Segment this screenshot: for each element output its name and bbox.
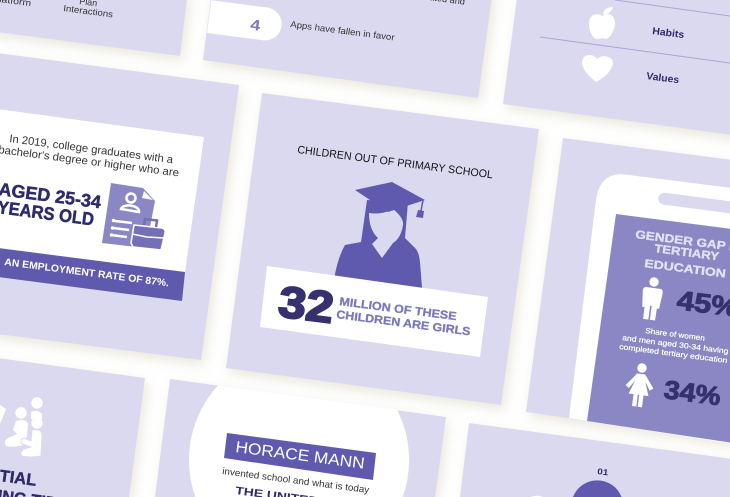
phone body <box>569 174 730 445</box>
icon: man <box>639 276 665 321</box>
phone speaker <box>657 192 730 215</box>
panel: essential tips slide <box>0 357 145 497</box>
white circle <box>189 386 409 497</box>
text: intro sentence: bachelor's degree or higher who are <box>0 144 180 179</box>
text: aged 25-34 years old: AGED 25-34 <box>0 179 102 212</box>
step circle <box>573 480 622 497</box>
icon: resume and briefcase <box>102 183 165 250</box>
banner: employment rate: AN EMPLOYMENT RATE OF 87%. <box>4 257 170 289</box>
title: children out of primary school: CHILDREN OUT OF PRIMARY SCHOOL <box>297 144 494 181</box>
text: invented school: invented school and what is today <box>222 466 370 496</box>
text: apps have fallen in favor: Apps have fallen in favor <box>290 19 395 43</box>
icon: woman <box>623 362 656 408</box>
banner: horace mann <box>224 433 376 480</box>
icon: heart <box>582 55 613 82</box>
white text card <box>0 108 204 272</box>
panel: horace mann slide <box>155 379 446 497</box>
panel: top right slide <box>503 0 730 136</box>
heading: gender gap in tertiary education: TERTIARY <box>654 243 720 263</box>
panel: gender gap phone slide <box>526 138 730 445</box>
panel: children out of primary school <box>226 93 539 405</box>
label: 01: 01 <box>597 466 609 477</box>
heading: gender gap in tertiary education <box>635 229 730 281</box>
text: million of these children are girls: MILLION OF THESE <box>339 296 458 323</box>
text: share of women and men: Share of women <box>645 326 705 343</box>
icon: apple <box>589 7 615 39</box>
text: million of these children are girls: CHILDREN ARE GIRLS <box>336 309 471 338</box>
text: million of these children are girls <box>336 296 471 338</box>
phone screen <box>587 214 730 444</box>
number: 32: 32 <box>276 277 337 333</box>
text: values: Values <box>646 71 680 86</box>
text: aged 25-34 years old <box>0 179 102 229</box>
banner: employment rate <box>0 247 185 301</box>
number pill 4 <box>207 0 284 42</box>
text: share of women and men <box>619 326 729 365</box>
panel: employment slide <box>0 52 239 360</box>
text: habits: Habits <box>652 26 685 41</box>
heading: gender gap in tertiary education: GENDER GAP IN <box>635 229 730 255</box>
panel: top left slide <box>0 0 188 56</box>
stat card: 32 million girls <box>260 266 488 357</box>
small white circle <box>531 496 543 497</box>
text: share of women and men: completed tertiary education <box>619 342 728 365</box>
banner: horace mann: HORACE MANN <box>234 439 366 473</box>
panel: top middle slide <box>203 0 493 98</box>
panel: numbered steps slide <box>460 423 730 497</box>
text: plan interactions label: Interactions <box>63 3 114 19</box>
number pill 4: 4 <box>249 17 262 35</box>
heading: gender gap in tertiary education: EDUCATION <box>644 258 726 281</box>
heading: essential learning tips <box>0 467 68 497</box>
icon: graduate silhouette <box>333 182 425 300</box>
text: share of women and men: and men aged 30-34 having <box>622 333 729 356</box>
text: intro sentence: In 2019, college graduates with a <box>9 133 175 166</box>
icon: seated people <box>0 397 43 457</box>
number: 34%: 34% <box>662 374 723 411</box>
